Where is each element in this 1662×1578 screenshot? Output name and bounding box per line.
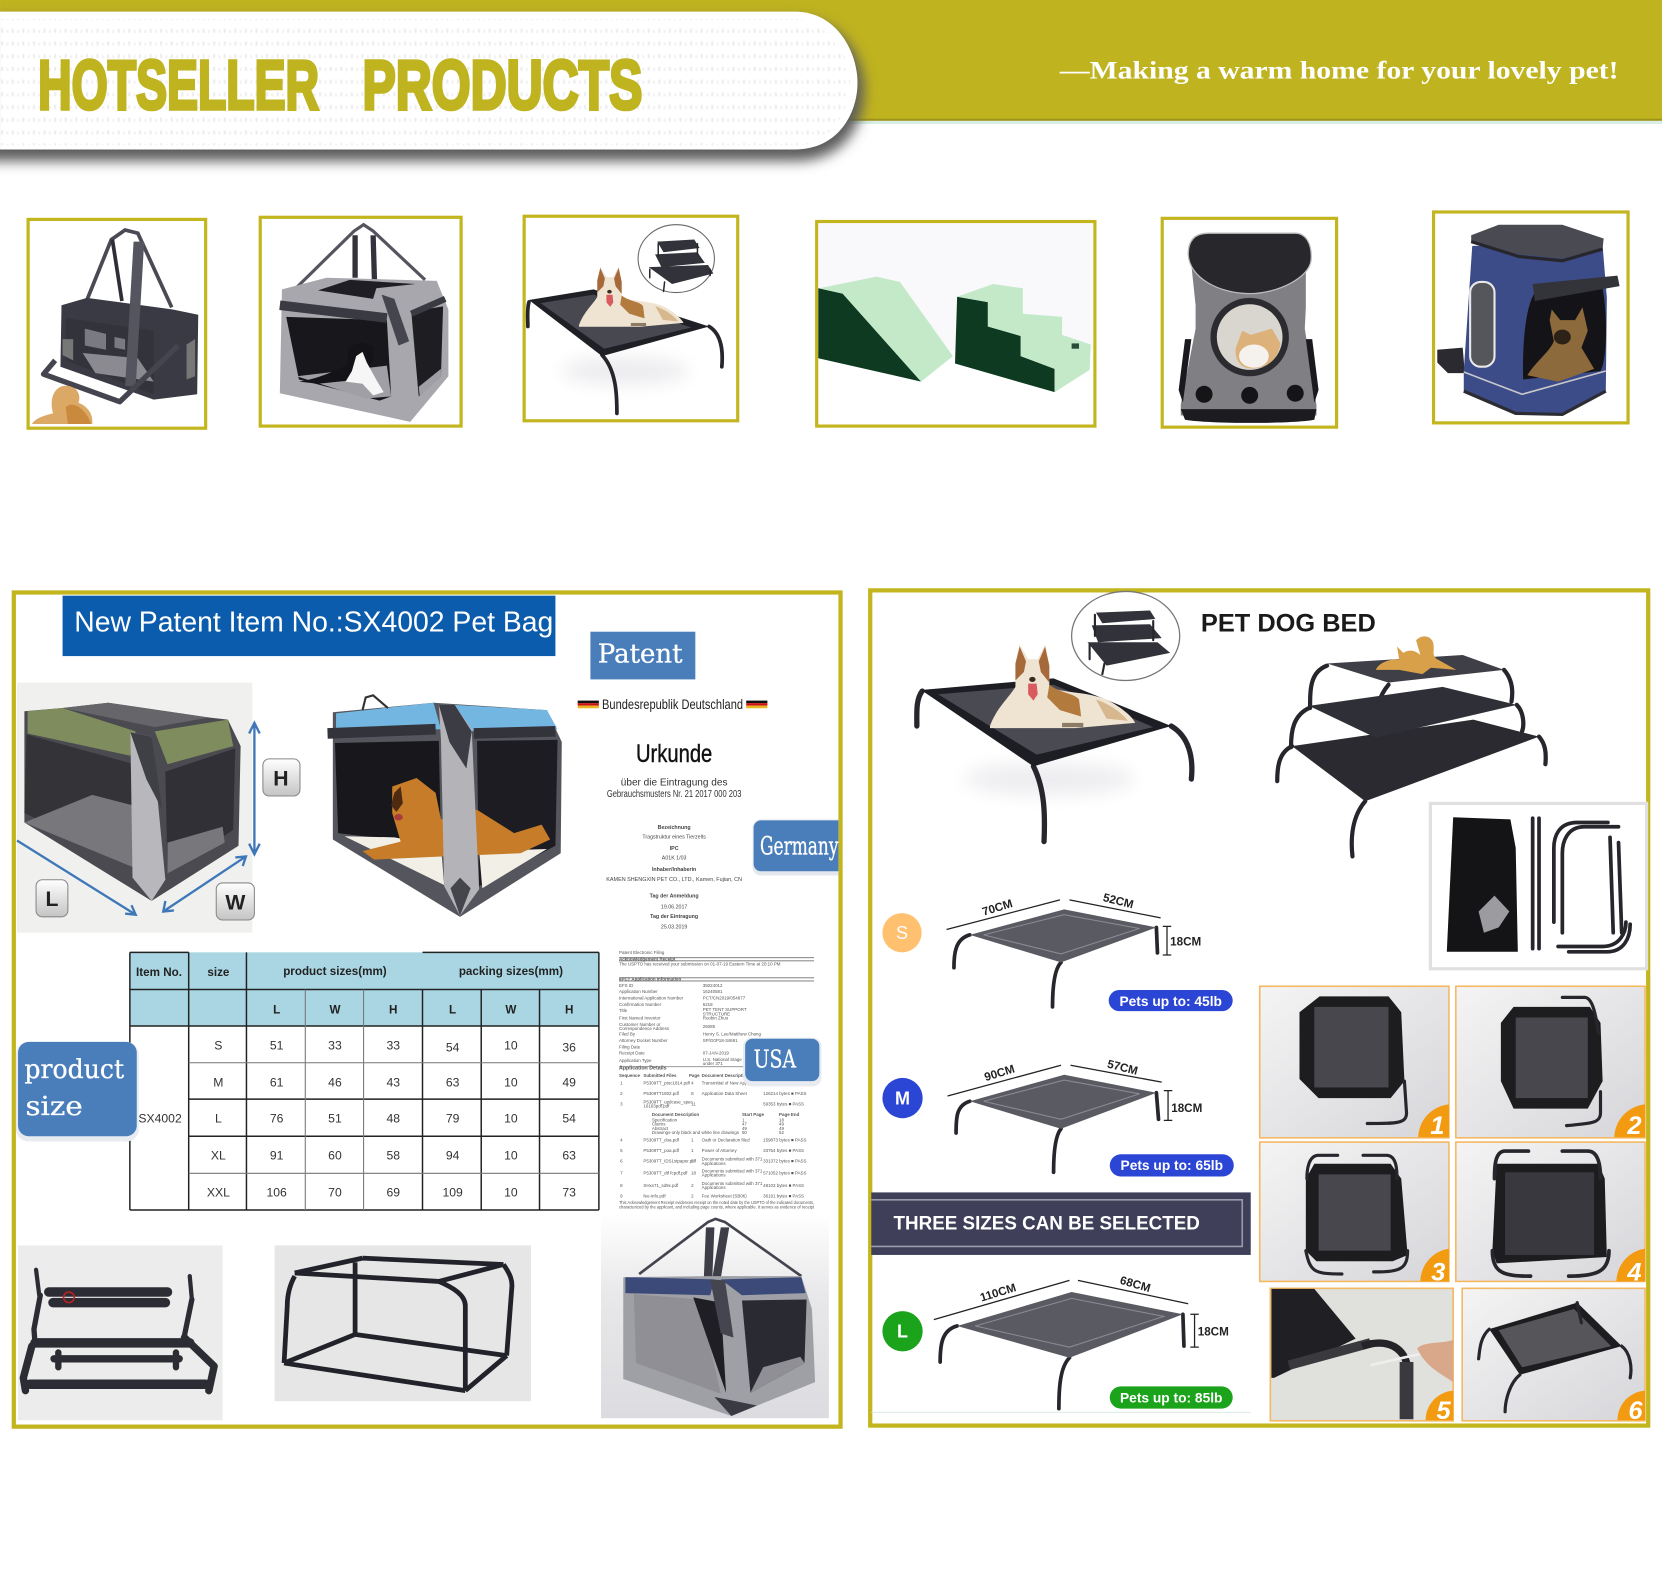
size S bed: 52CM — [1102, 891, 1135, 911]
size S marker: S — [896, 923, 908, 943]
USA patent receipt: 49 — [779, 1126, 785, 1131]
size L bed: 110CM — [979, 1281, 1018, 1304]
USA patent receipt: Applications — [702, 1185, 726, 1190]
size table: product sizes(mm) — [283, 965, 387, 978]
product: elevated dog bed with husky — [524, 216, 738, 421]
USA patent receipt: Abstract — [652, 1126, 669, 1131]
USA patent receipt: Documents submitted with 371 — [702, 1168, 763, 1173]
German patent certificate: Gebrauchsmusters Nr. 21 2017 000 203 — [607, 789, 742, 800]
patent badge — [590, 632, 695, 679]
dimension key L — [36, 880, 68, 917]
German patent certificate: 19.06.2017 — [661, 904, 687, 910]
parts kit photo — [1430, 803, 1647, 969]
German patent certificate: Bezeichnung — [658, 825, 691, 831]
USA patent receipt: SHxx71_sd9x.pdf — [643, 1183, 679, 1188]
USA patent receipt: Correspondence Address — [619, 1026, 670, 1031]
USA patent receipt: 11 — [691, 1101, 696, 1106]
size table: 51 — [328, 1111, 342, 1125]
size table: 33 — [386, 1038, 400, 1052]
stacked beds with dogs — [1277, 636, 1546, 856]
USA patent receipt: P5309TT_dtf fcpdf.pdf — [643, 1170, 688, 1175]
USA patent receipt: Ruobin Zhuo — [703, 1016, 729, 1021]
German patent certificate: Inhaber/Inhaberin — [652, 867, 696, 873]
size table: XL — [211, 1149, 226, 1163]
USA patent receipt: 33754 bytes ■ PASS — [763, 1148, 804, 1153]
USA patent receipt: 48103 bytes ■ PASS — [763, 1183, 804, 1188]
German patent certificate: Tag der Anmeldung — [650, 894, 699, 900]
USA patent receipt: Document Description — [702, 1073, 749, 1078]
USA patent receipt: P5309TT_poa.pdf — [643, 1148, 680, 1153]
size table: 70 — [328, 1186, 342, 1200]
size table: 48 — [386, 1111, 400, 1125]
USA patent receipt: EFS ID — [619, 983, 633, 988]
folded frame photo — [18, 1245, 223, 1420]
USA patent receipt: 16163pdf.pdf — [643, 1104, 670, 1109]
USA patent receipt: Acknowledgement Receipt — [619, 956, 676, 961]
USA patent receipt: P5309TT_ptoc1814.pdf — [643, 1080, 691, 1085]
size table: 63 — [446, 1075, 460, 1089]
USA patent receipt: P5309TT_updcase_spec — [643, 1099, 694, 1104]
size table: L — [449, 1003, 456, 1016]
USA patent receipt: P5309TT1802.pdf — [643, 1091, 680, 1096]
USA patent receipt: 36191 bytes ■ PASS — [763, 1194, 804, 1199]
USA patent receipt: Application Number — [619, 989, 658, 994]
German patent certificate: über die Eintragung des — [621, 777, 727, 788]
USA patent receipt: 18 — [691, 1170, 697, 1175]
German patent certificate: Tag der Eintragung — [650, 914, 698, 920]
size table: 69 — [386, 1186, 400, 1200]
USA patent receipt: 5 — [620, 1148, 623, 1153]
size L bed: 18CM — [1198, 1325, 1229, 1338]
panel: SX4002 pet bag — [14, 592, 841, 1427]
USA patent receipt: 571052 bytes ■ PASS — [763, 1170, 807, 1175]
product: soft carrier bag with puppy — [28, 219, 206, 428]
product: grey foldable crate with dog — [260, 217, 461, 426]
USA patent receipt: Receipt Date — [619, 1051, 645, 1056]
USA patent receipt: STRUCTURE — [703, 1011, 730, 1016]
size S bed — [882, 891, 1233, 1011]
USA patent receipt: Application Data Sheet — [702, 1091, 748, 1096]
USA patent receipt: Specification — [652, 1117, 678, 1122]
circular inset of stacked beds — [1072, 591, 1180, 680]
product: navy backpack with shepherd dog — [1434, 212, 1628, 423]
size table: packing sizes(mm) — [459, 965, 563, 978]
panel: pet dog bed — [870, 590, 1648, 1426]
USA patent receipt: Henry S. Lee/Matthew Chang — [703, 1032, 761, 1037]
pets up to 65lb pill: Pets up to: 65lb — [1121, 1158, 1223, 1173]
USA patent receipt: Power of Attorney — [702, 1148, 737, 1153]
German patent certificate: IPC — [670, 846, 679, 852]
size table: 73 — [562, 1186, 576, 1200]
product size badge: size — [25, 1091, 83, 1122]
USA patent receipt: Patent Electronic Filing — [619, 950, 665, 955]
size L marker: L — [897, 1322, 908, 1342]
heading: hotseller products: HOTSELLER — [38, 46, 319, 124]
dimension arrows — [17, 723, 260, 915]
USA patent receipt: 1 — [691, 1148, 694, 1153]
assembly step 3: 3 — [1431, 1258, 1445, 1286]
USA patent receipt — [619, 950, 815, 1209]
size S marker — [882, 913, 922, 952]
size table: size — [207, 966, 230, 979]
size table: 54 — [562, 1111, 576, 1125]
size table: S — [214, 1038, 222, 1052]
size table: L — [273, 1003, 280, 1016]
USA patent receipt: 2 — [691, 1183, 694, 1188]
header shadow — [0, 19, 864, 161]
USA patent receipt: Attorney Docket Number — [619, 1038, 668, 1043]
dimension key L: L — [45, 888, 58, 911]
USA patent receipt: 4 — [620, 1138, 623, 1143]
size M bed: 57CM — [1106, 1058, 1139, 1078]
size table: 91 — [270, 1149, 284, 1163]
USA patent receipt: 4 — [691, 1080, 694, 1085]
USA patent receipt: Start Page — [742, 1112, 764, 1117]
USA patent receipt: ePCT Application Information — [619, 976, 682, 981]
assembly step 4: 4 — [1626, 1258, 1641, 1286]
size L marker — [882, 1311, 923, 1351]
size L bed — [871, 1274, 1251, 1413]
USA patent receipt: 126214 bytes ■ PASS — [763, 1091, 807, 1096]
assembly step 1: 1 — [1430, 1112, 1444, 1140]
USA patent receipt: 331372 bytes ■ PASS — [763, 1159, 807, 1164]
size table: W — [505, 1003, 516, 1016]
USA patent receipt: International Application Number — [619, 995, 684, 1000]
collie — [299, 342, 373, 384]
size table: 79 — [446, 1111, 460, 1125]
navy crate photo — [601, 1214, 829, 1418]
USA patent receipt: 50 — [742, 1130, 747, 1135]
German patent certificate: Tragstruktur eines Tierzelts — [642, 834, 706, 840]
USA patent receipt: The USPTO has received your submission on 01-07-19 Eastern Time at 20:10 PM — [619, 962, 781, 967]
USA patent receipt: 3 — [691, 1159, 694, 1164]
USA patent receipt: Applications — [702, 1161, 726, 1166]
size S bed: 70CM — [981, 897, 1014, 919]
dimension key W — [216, 883, 254, 920]
USA patent receipt: 2 — [620, 1091, 623, 1096]
German patent certificate: A01K 1/03 — [662, 856, 687, 862]
pets up to 65lb pill — [1110, 1154, 1234, 1177]
USA patent receipt: P5309TT_doa.pdf — [643, 1138, 680, 1143]
size M bed — [882, 1058, 1234, 1177]
size table: 51 — [270, 1038, 284, 1052]
size table: M — [213, 1075, 223, 1089]
German patent certificate: Bundesrepublik Deutschland — [602, 697, 743, 712]
product size badge — [16, 1042, 139, 1142]
assembly step 5 — [1270, 1288, 1453, 1425]
USA patent receipt: Documents submitted with 371 — [702, 1157, 763, 1162]
German patent certificate: 25.03.2019 — [661, 924, 687, 930]
size S bed: 18CM — [1170, 935, 1201, 948]
USA patent receipt: PCT/CN2019/054877 — [703, 995, 746, 1000]
size table: 76 — [270, 1111, 284, 1125]
size table: 61 — [270, 1075, 284, 1089]
USA patent receipt: 16240581 — [703, 989, 723, 994]
size M bed: 90CM — [983, 1062, 1016, 1084]
USA patent receipt: Claims — [652, 1122, 666, 1127]
Germany badge — [753, 819, 839, 875]
USA patent receipt: 9 — [620, 1194, 623, 1199]
product size badge: product — [24, 1054, 124, 1085]
USA patent receipt: Transmittal of New Application — [702, 1080, 762, 1085]
pets up to 85lb pill — [1110, 1386, 1233, 1409]
USA patent receipt: Page — [689, 1073, 700, 1078]
size table: 10 — [504, 1075, 518, 1089]
assembly step 2 — [1456, 986, 1645, 1140]
blue crate with golden dog — [328, 695, 562, 917]
size table: 94 — [446, 1149, 460, 1163]
USA patent receipt: Title — [619, 1008, 628, 1013]
USA patent receipt: 47 — [742, 1122, 747, 1127]
USA badge — [743, 1038, 821, 1086]
USA patent receipt: 7 — [620, 1170, 623, 1175]
size M marker — [882, 1078, 923, 1118]
size table: 60 — [328, 1149, 342, 1163]
dimension key H: H — [273, 767, 289, 790]
size table — [130, 952, 599, 1210]
USA patent receipt: First Named Inventor — [619, 1016, 661, 1021]
USA patent receipt: 1 — [620, 1080, 623, 1085]
size M marker: M — [895, 1088, 910, 1108]
USA patent receipt: 8 — [620, 1183, 623, 1188]
USA patent receipt: Drawings-only black and white line drawings — [652, 1130, 740, 1135]
USA patent receipt: under 371 — [703, 1061, 723, 1066]
USA patent receipt: 49 — [742, 1126, 747, 1131]
USA patent receipt: 18 — [779, 1117, 785, 1122]
pets up to 85lb pill: Pets up to: 85lb — [1120, 1390, 1222, 1405]
assembly step 6: 6 — [1628, 1397, 1643, 1425]
patent badge: Patent — [598, 638, 683, 669]
heading: hotseller products: PRODUCTS — [363, 46, 642, 124]
tagline: —Making a warm home for your lovely pet! — [1059, 55, 1619, 84]
pets up to 45lb pill: Pets up to: 45lb — [1119, 994, 1222, 1009]
assembly step 3 — [1260, 1142, 1449, 1286]
USA patent receipt: U.S. National Stage — [703, 1057, 742, 1062]
size table: 46 — [328, 1075, 342, 1089]
USA patent receipt: P5309TT_IDS1stpaper.pdf — [643, 1159, 697, 1164]
USA patent receipt: 6 — [620, 1159, 623, 1164]
header banner — [0, 0, 1662, 161]
USA patent receipt: Document Description — [652, 1112, 700, 1117]
size table: 36 — [562, 1040, 576, 1054]
USA patent receipt: 2 — [691, 1194, 694, 1199]
pets up to 45lb pill — [1109, 990, 1233, 1011]
USA patent receipt: Applications — [702, 1173, 726, 1178]
USA patent receipt: 6218 — [703, 1002, 713, 1007]
size table: L — [215, 1111, 222, 1125]
heading: pet dog bed: PET DOG BED — [1201, 610, 1376, 638]
dimension key W: W — [225, 891, 245, 914]
USA patent receipt: 1 — [742, 1117, 745, 1122]
product: bubble backpack with cat — [1162, 218, 1337, 427]
title bar — [63, 596, 555, 656]
USA patent receipt: Submitted Files — [643, 1073, 677, 1078]
USA patent receipt: SP/G0P18-34691 — [703, 1038, 738, 1043]
USA patent receipt: 8 — [691, 1091, 694, 1096]
assembly step 4 — [1456, 1142, 1645, 1286]
USA patent receipt: Page End — [779, 1112, 800, 1117]
header white tab — [0, 12, 857, 149]
size table: H — [389, 1003, 397, 1016]
Germany badge: Germany — [760, 830, 839, 860]
USA patent receipt: fee-info.pdf — [643, 1194, 666, 1199]
size table: 43 — [386, 1075, 400, 1089]
German patent certificate: Urkunde — [636, 740, 712, 768]
size table: 33 — [328, 1038, 342, 1052]
bed with husky — [917, 644, 1192, 842]
USA patent receipt: Application Type — [619, 1058, 652, 1063]
USA patent receipt: 07-JAN-2019 — [703, 1051, 729, 1056]
product: foam ramp and stairs — [817, 222, 1095, 426]
size table: XXL — [207, 1186, 230, 1200]
size table: 10 — [504, 1038, 518, 1052]
size table: 54 — [446, 1040, 460, 1054]
size L bed: 68CM — [1118, 1274, 1152, 1295]
USA patent receipt: 25085 — [703, 1024, 716, 1029]
USA patent receipt: Oath or Declaration filed — [702, 1138, 750, 1143]
USA patent receipt: 159873 bytes ■ PASS — [763, 1138, 807, 1143]
USA patent receipt: 1 — [691, 1138, 694, 1143]
USA badge: USA — [754, 1044, 796, 1073]
German patent certificate — [578, 697, 767, 930]
USA patent receipt: Filed By — [619, 1032, 636, 1037]
USA patent receipt: Documents submitted with 371 — [702, 1181, 763, 1186]
size table: 10 — [504, 1111, 518, 1125]
USA patent receipt: Application Details — [619, 1065, 667, 1071]
size table: 106 — [267, 1186, 287, 1200]
assembly step 6 — [1462, 1288, 1645, 1425]
USA patent receipt: Confirmation Number — [619, 1002, 662, 1007]
size M bed: 18CM — [1171, 1102, 1202, 1115]
title bar: New Patent Item No.:SX4002 Pet Bag — [74, 607, 553, 639]
three sizes banner: THREE SIZES CAN BE SELECTED — [894, 1214, 1200, 1235]
assembly step 1 — [1260, 986, 1449, 1140]
USA patent receipt: 52 — [779, 1130, 785, 1135]
USA patent receipt: 3 — [620, 1101, 623, 1106]
size table: 10 — [504, 1149, 518, 1163]
size table: 63 — [562, 1149, 576, 1163]
USA patent receipt: Fee Worksheet (SB06) — [702, 1194, 747, 1199]
size table: 10 — [504, 1186, 518, 1200]
size table: SX4002 — [138, 1111, 182, 1125]
USA patent receipt: Customer Number or — [619, 1022, 661, 1027]
size table: Item No. — [136, 966, 182, 979]
USA patent receipt: Sequence — [619, 1073, 641, 1078]
size table: 109 — [442, 1186, 463, 1200]
USA patent receipt: 59353 bytes ■ PASS — [763, 1101, 804, 1106]
size table: 49 — [562, 1075, 576, 1089]
size table: W — [329, 1003, 340, 1016]
size table: 58 — [386, 1149, 400, 1163]
German patent certificate: KAMEN SHENGXIN PET CO., LTD., Kamen, Fujian, CN — [606, 877, 742, 883]
USA patent receipt: 35024012 — [703, 983, 723, 988]
assembly step 5: 5 — [1437, 1397, 1452, 1425]
three sizes banner — [871, 1192, 1251, 1255]
assembly step 2: 2 — [1626, 1112, 1641, 1140]
USA patent receipt: characterized by the applicant, and including page counts, where applicable. It serves as evidence of receipt — [619, 1204, 815, 1209]
USA patent receipt: 49 — [779, 1122, 785, 1127]
dimension key H — [263, 759, 300, 796]
green crate with dimensions — [17, 683, 300, 933]
size table: H — [565, 1003, 573, 1016]
open frame photo — [275, 1245, 531, 1401]
USA patent receipt: This Acknowledgement Receipt evidences receipt on the noted date by the USPTO of the indicated documents, — [619, 1200, 814, 1205]
USA patent receipt: PET TENT SUPPORT — [703, 1007, 747, 1012]
USA patent receipt: Filing Date — [619, 1044, 641, 1049]
